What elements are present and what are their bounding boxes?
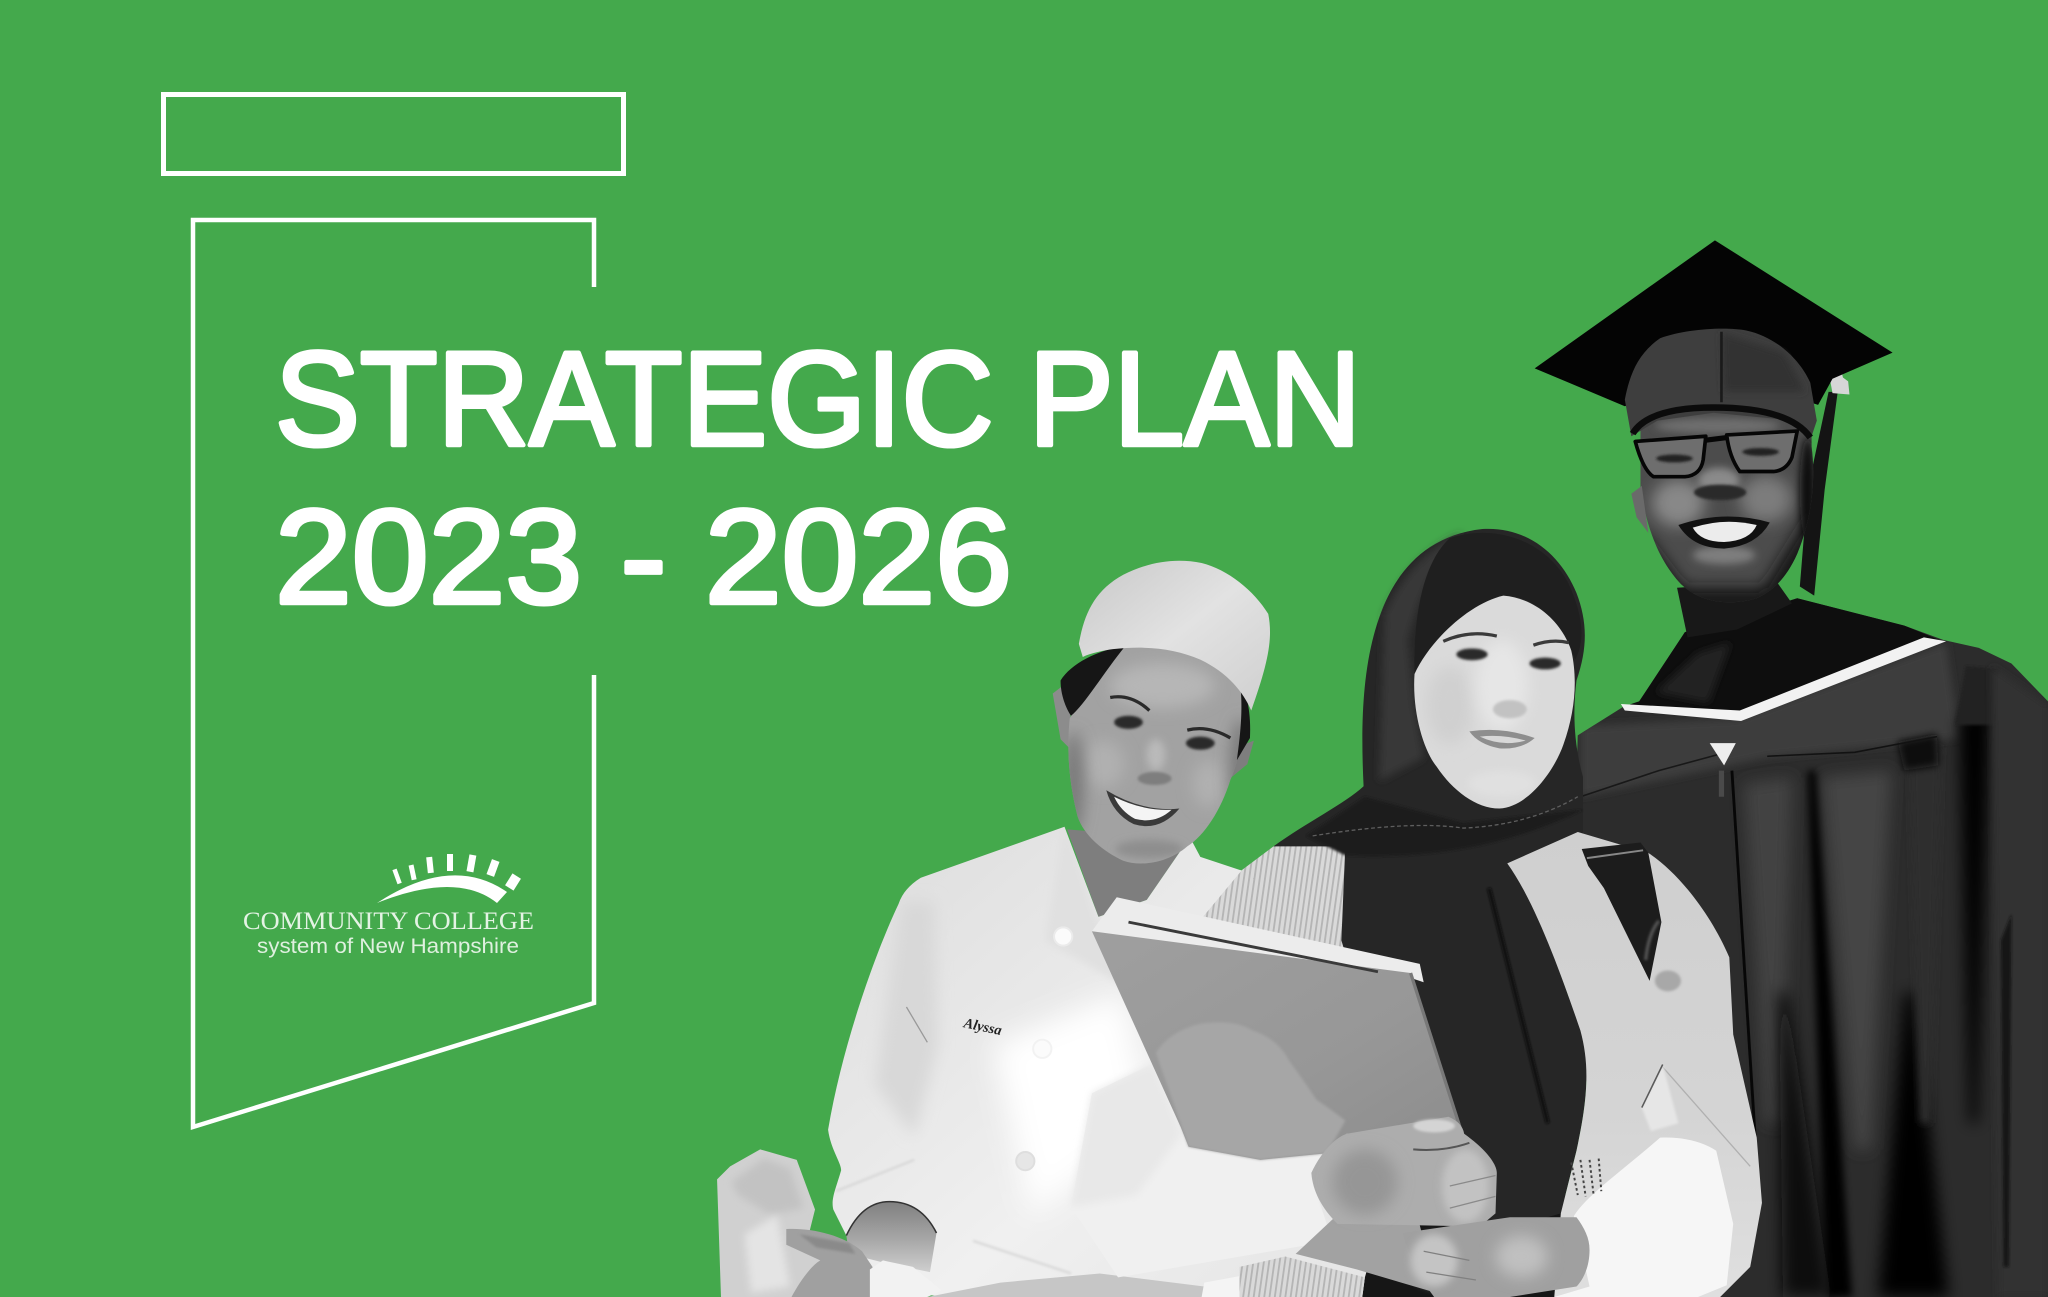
woman's face bbox=[1414, 596, 1575, 808]
logo wordmark: COMMUNITY COLLEGE bbox=[243, 908, 534, 935]
sweater bbox=[1189, 840, 1348, 993]
person: chef with white coat bbox=[717, 561, 1371, 1297]
hood bbox=[1624, 598, 1940, 712]
forearm and hand bbox=[786, 1202, 1215, 1297]
decorative outline rectangle bbox=[164, 94, 624, 174]
forearm bbox=[1296, 1215, 1437, 1293]
paper bag bbox=[717, 1149, 836, 1297]
chef hair bbox=[1061, 645, 1250, 760]
photo group: three students bbox=[717, 240, 2048, 1297]
folder bbox=[1092, 897, 1464, 1160]
bag strap bbox=[1582, 842, 1661, 981]
neck bbox=[1677, 581, 1792, 637]
white lower sleeve bbox=[1554, 1137, 1733, 1297]
tassel bbox=[1800, 360, 1849, 596]
scarf and hijab bbox=[1273, 529, 1586, 1234]
face bbox=[1631, 412, 1814, 602]
chef coat bbox=[828, 823, 1371, 1297]
title bbox=[275, 325, 1361, 632]
cap skull bbox=[1625, 329, 1817, 440]
smile bbox=[1678, 517, 1770, 549]
person: graduate in cap and gown bbox=[1535, 240, 2048, 1297]
outline banner frame bbox=[193, 220, 594, 1127]
shirt collar bbox=[1710, 743, 1736, 765]
chef neck bbox=[1067, 829, 1190, 917]
striped cuff bbox=[1240, 1256, 1365, 1297]
under layer at bottom bbox=[1362, 1195, 1587, 1297]
coat buttons bbox=[1054, 927, 1072, 946]
person: woman in hijab holding folder bbox=[1071, 529, 1762, 1297]
chef face bbox=[1053, 640, 1254, 863]
mortarboard cap bbox=[1535, 240, 1893, 406]
logo: Community College System of New Hampshire bbox=[243, 854, 534, 958]
gown bbox=[1567, 598, 2048, 1297]
embroidered print bbox=[1571, 1159, 1601, 1196]
nose bbox=[1694, 485, 1746, 500]
white hood stripe bbox=[1621, 637, 1946, 721]
chef hat bbox=[1079, 561, 1270, 711]
lower hand bbox=[1403, 1217, 1590, 1297]
jacket bbox=[1507, 832, 1762, 1297]
logo tagline: system of New Hampshire bbox=[257, 935, 519, 958]
title: STRATEGIC PLAN bbox=[275, 325, 1361, 474]
hand holding folder bbox=[1311, 1117, 1497, 1226]
white sleeve bbox=[1071, 1063, 1332, 1277]
zipper bbox=[1719, 771, 1724, 797]
title: 2023 - 2026 bbox=[275, 483, 1012, 632]
glasses bbox=[1635, 431, 1797, 477]
gown folds bbox=[1580, 643, 1959, 797]
embroidered name: Alyssa bbox=[961, 1015, 1003, 1039]
logo icon: rising sun arc with rays bbox=[377, 854, 521, 903]
ear bbox=[1631, 486, 1648, 533]
